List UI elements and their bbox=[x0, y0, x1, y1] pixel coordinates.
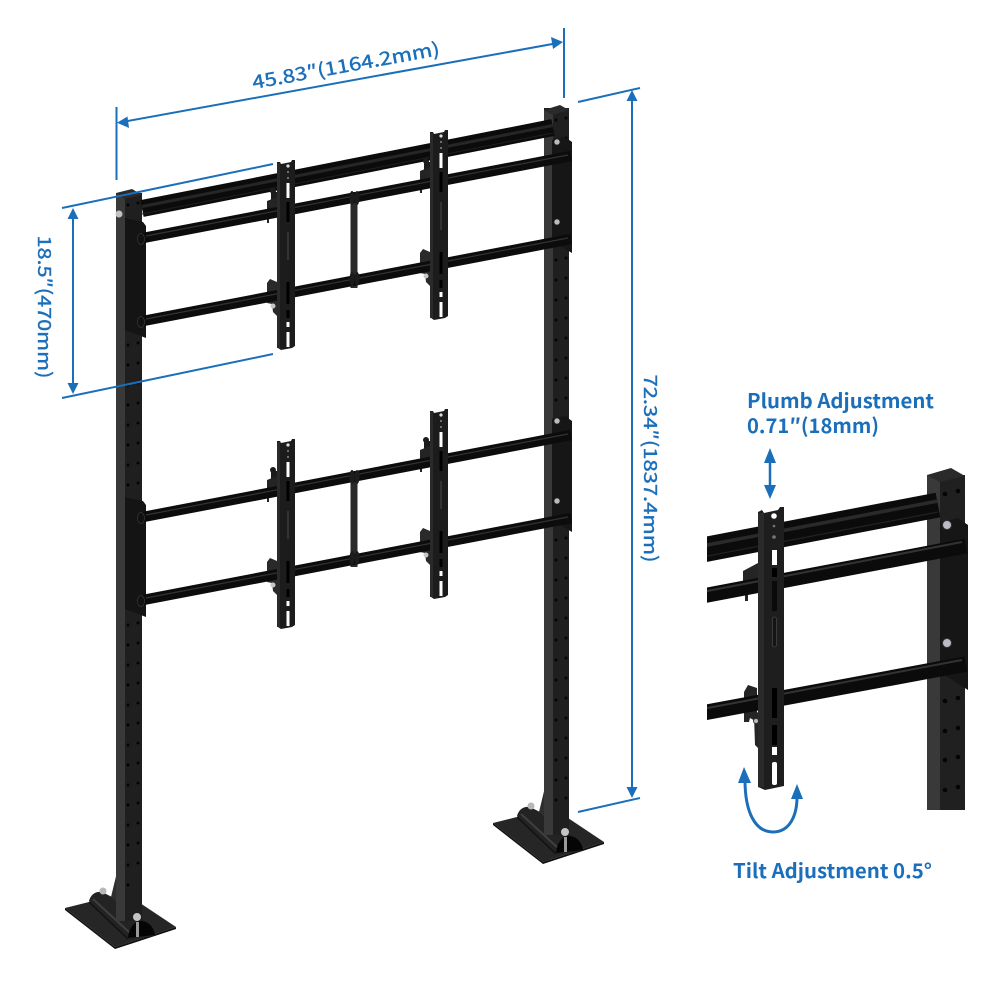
top horizontal rail bbox=[142, 126, 553, 214]
foot hardware: right bbox=[556, 828, 583, 853]
height label: 72.34″(1837.4mm) bbox=[638, 374, 664, 562]
foot: right base plate bbox=[493, 783, 604, 864]
inset bolts bbox=[754, 520, 952, 724]
inset tabs bbox=[743, 563, 758, 748]
inset vertical plate bbox=[758, 507, 784, 790]
spacing label: 18.5″(470mm) bbox=[32, 236, 58, 378]
width label: 45.83″(1164.2mm) bbox=[250, 35, 442, 95]
dimension: width bbox=[116, 28, 564, 180]
arrow: plumb double arrow bbox=[764, 448, 776, 499]
callout: tilt adjustment: Tilt Adjustment 0.5° bbox=[733, 855, 932, 884]
inset lower bar bbox=[697, 660, 966, 714]
arrow: tilt curved arrow bbox=[738, 767, 803, 832]
plumb value: 0.71″(18mm) bbox=[747, 410, 879, 439]
right upright post bbox=[544, 105, 569, 835]
lower mounting section: bars, brackets, vertical plates bbox=[125, 409, 572, 629]
upper mounting section: bars, brackets, vertical plates bbox=[125, 130, 572, 350]
dimension: rail spacing bbox=[32, 164, 273, 398]
inset post bbox=[927, 468, 965, 810]
plumb heading: Plumb Adjustment bbox=[747, 385, 935, 414]
left upright post bbox=[116, 189, 142, 921]
inset detail: adjustment close-up bbox=[697, 468, 968, 810]
dimension: height bbox=[578, 88, 664, 812]
inset top rail bbox=[697, 501, 938, 558]
callout: plumb adjustment bbox=[747, 385, 935, 439]
foot: left base plate bbox=[65, 868, 176, 949]
inset middle bar bbox=[697, 542, 966, 597]
inset post bracket bbox=[940, 518, 968, 690]
foot hardware: left bbox=[128, 913, 155, 938]
